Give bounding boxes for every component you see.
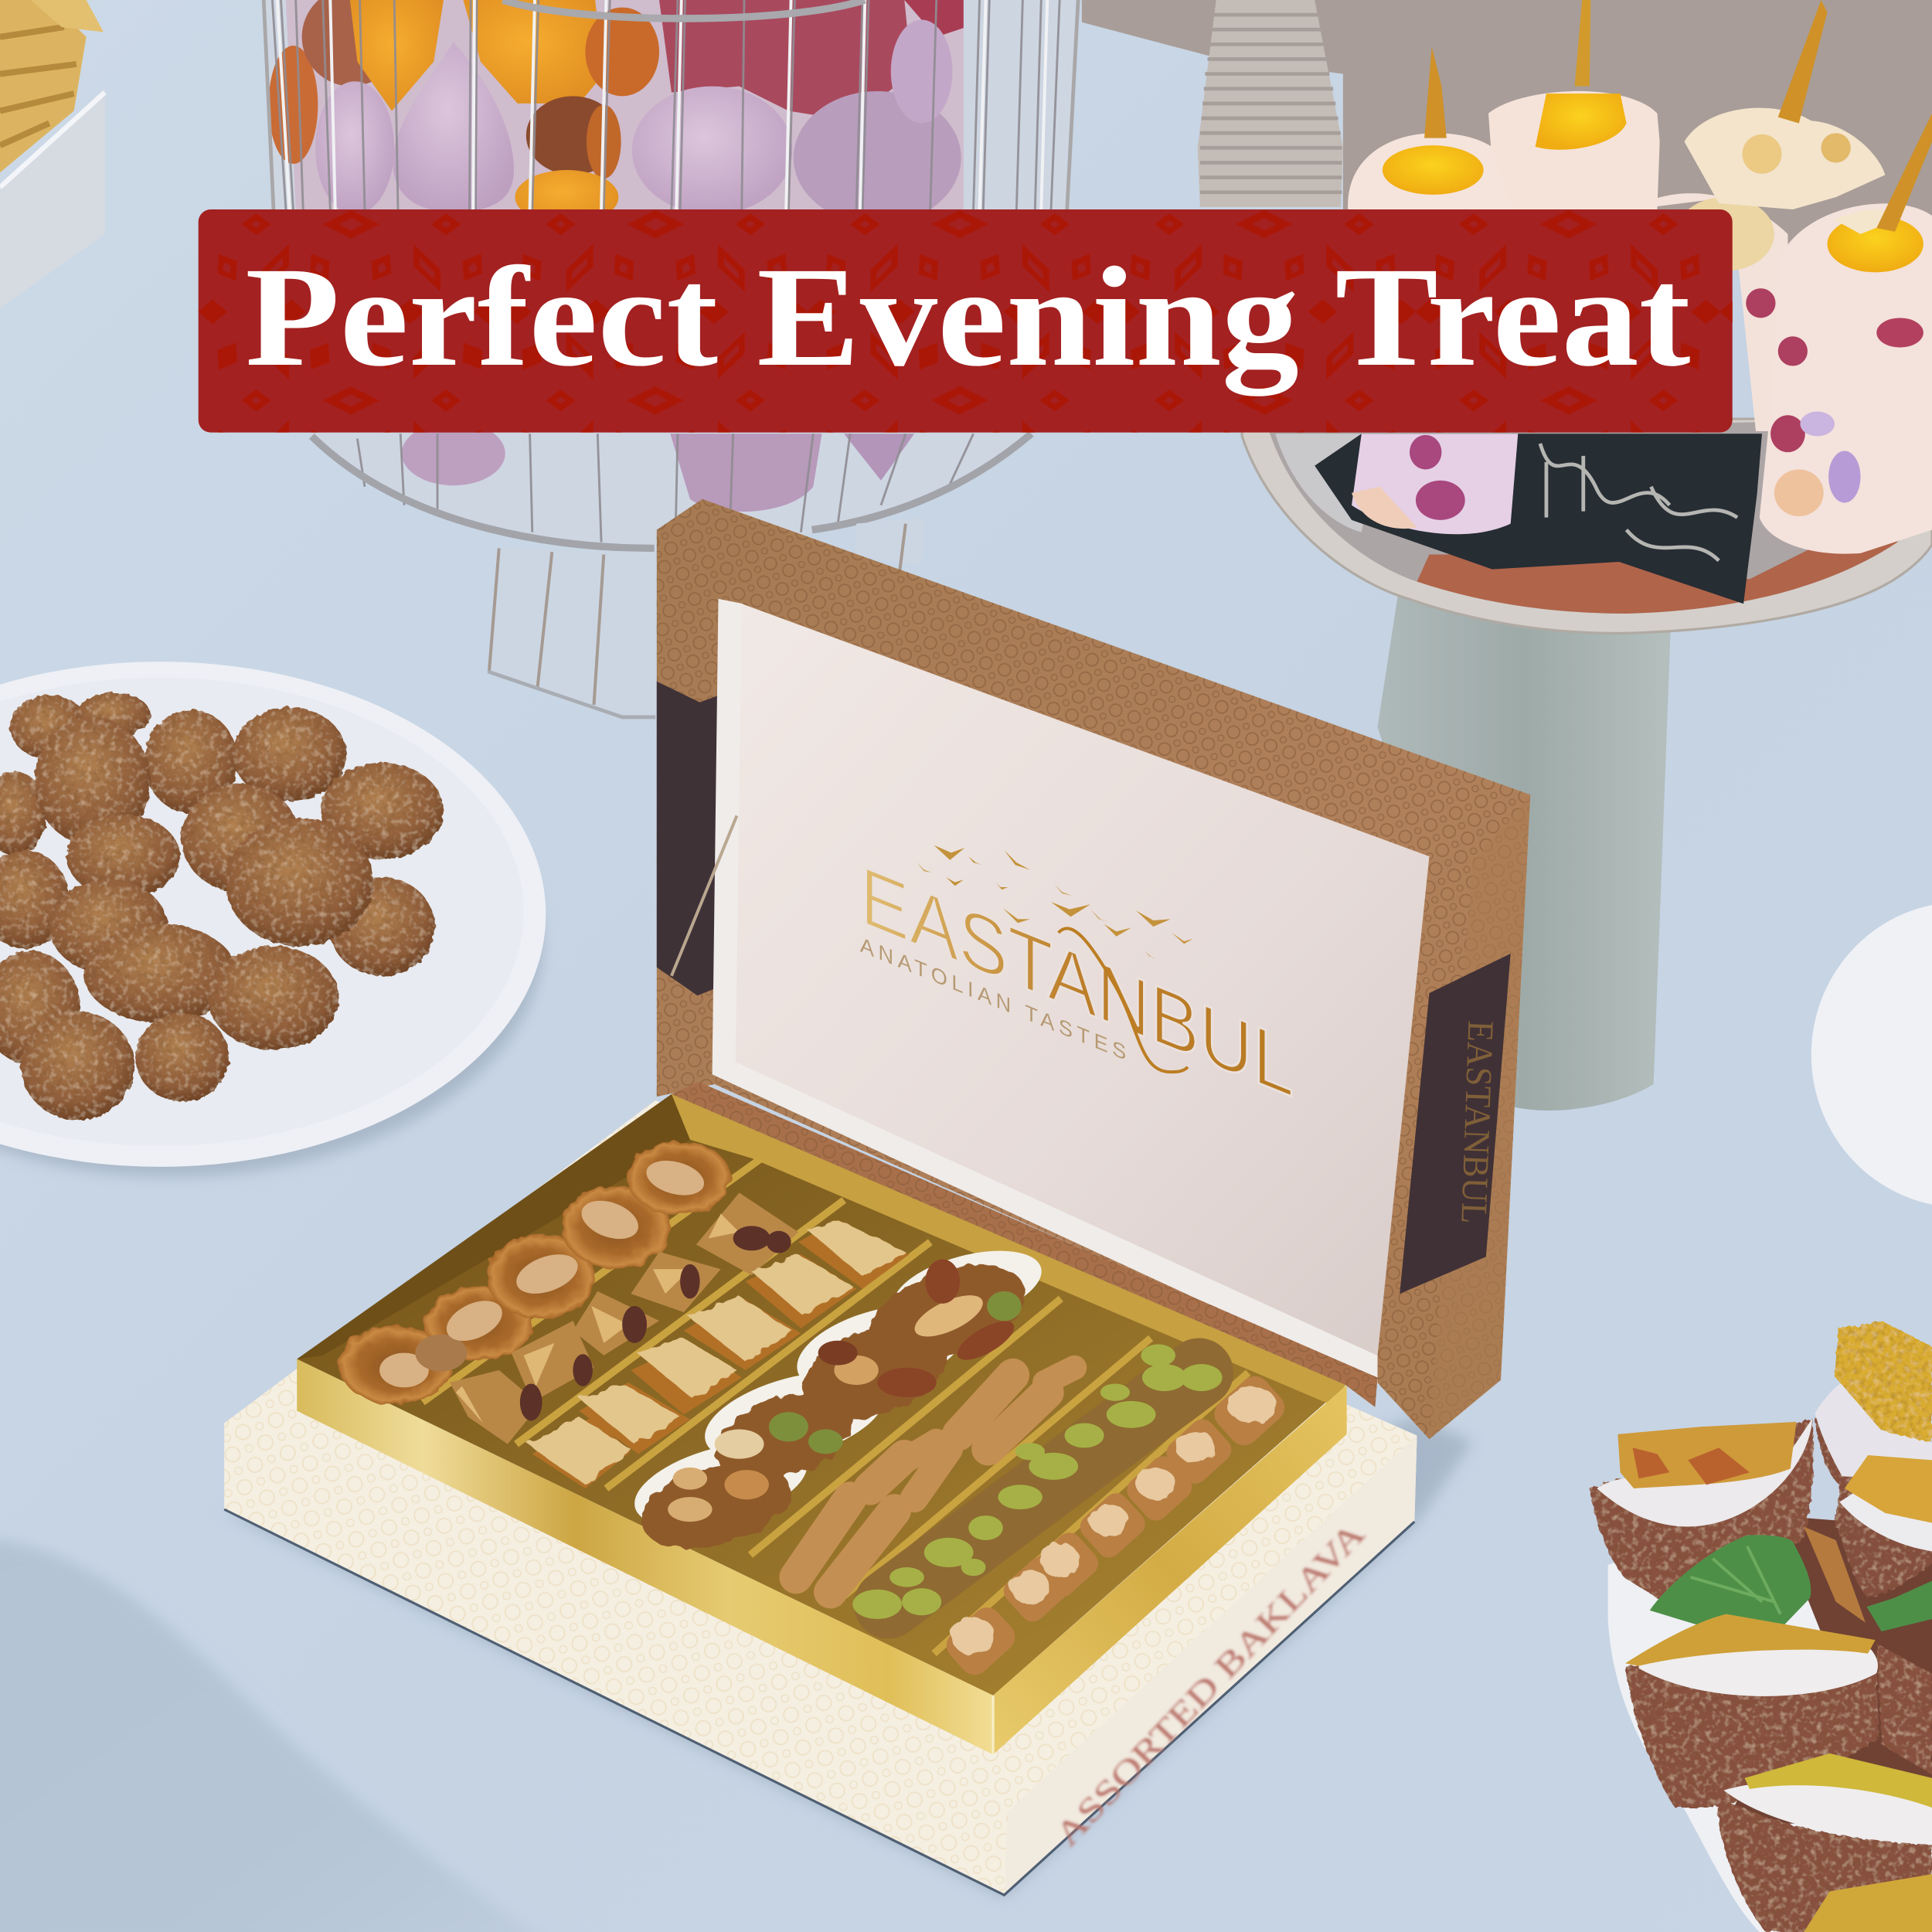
title banner xyxy=(199,209,1733,433)
row 2: pistachio baklava triangles xyxy=(450,1192,798,1444)
row 5: rolled pastry fingers xyxy=(796,1368,1074,1592)
basket wires xyxy=(272,0,1060,549)
tartlet bottom xyxy=(1717,1753,1932,1932)
title text: Perfect Evening Treat xyxy=(245,238,1691,396)
wire fruit basket xyxy=(264,0,1078,717)
top cups with yellow domes xyxy=(1348,0,1932,272)
tray front wall xyxy=(297,1359,993,1754)
tartlet centre xyxy=(1625,1614,1879,1808)
bottom right plate with filled tartlets xyxy=(1590,1321,1932,1932)
tray right wall xyxy=(993,1385,1347,1754)
crackers and metal tray, top left xyxy=(0,0,105,308)
round white plate, right edge xyxy=(1811,902,1932,1207)
walnut piece xyxy=(1804,1526,1866,1623)
box base sides xyxy=(224,1100,1417,1895)
tartlet top right xyxy=(1815,1321,1932,1528)
shadow under box xyxy=(222,1417,1472,1897)
plate with coconut macaroons xyxy=(0,662,546,1177)
logo birds xyxy=(917,845,1192,958)
row 7: cut nut rolls xyxy=(940,1370,1291,1681)
row 6: pistachio baklava strip xyxy=(852,1344,1223,1619)
row 4: mixed nut clusters in paper cups xyxy=(625,1237,1049,1563)
side label: ASSORTED BAKLAVA xyxy=(1049,1515,1372,1853)
white inner bevel xyxy=(713,599,1378,1383)
basil leaves xyxy=(1650,1535,1932,1631)
cake stand plate with desserts xyxy=(1242,0,1932,634)
tartlet left xyxy=(1590,1418,1814,1598)
box lid xyxy=(657,499,1530,1439)
logo swash xyxy=(1059,928,1188,1072)
gold tray xyxy=(297,1094,1347,1754)
cake stand pedestal xyxy=(1378,591,1672,1111)
shaded gap between tartlets xyxy=(1725,1515,1932,1824)
tartlet right lower xyxy=(1876,1644,1932,1774)
ribbed vase xyxy=(1198,0,1343,207)
lilac roll xyxy=(1352,434,1518,534)
tray dividers xyxy=(423,1158,1248,1654)
basket stand xyxy=(488,518,924,717)
row 1: kadayif nests with cashews xyxy=(338,1141,730,1405)
dark spine band left xyxy=(657,682,719,995)
row 3: layered nut bars xyxy=(527,1219,910,1488)
dark spine band right with faint lettering xyxy=(1400,954,1511,1294)
tall cream rolls xyxy=(1633,193,1932,554)
inner back wall highlight xyxy=(672,1094,1345,1405)
logo tagline: ANATOLIAN TASTES xyxy=(860,932,1126,1065)
chalkboard sign xyxy=(1315,434,1762,604)
dark spine band right with faint lettering: EASTANBUL xyxy=(1453,1020,1501,1225)
tartlet middle right xyxy=(1835,1455,1932,1598)
inner lid panel xyxy=(736,604,1429,1355)
pink and orange fruits in basket xyxy=(269,0,1037,512)
patterned lid lip behind tray xyxy=(672,1082,1378,1407)
logo wordmark EASTANBUL: EASTANBUL xyxy=(860,849,1294,1115)
macaroon pile xyxy=(0,692,444,1120)
wall behind table xyxy=(1082,0,1932,247)
ribbon string xyxy=(672,815,736,976)
baklava gift box xyxy=(222,499,1530,1897)
tablecloth fold xyxy=(0,1540,554,1932)
